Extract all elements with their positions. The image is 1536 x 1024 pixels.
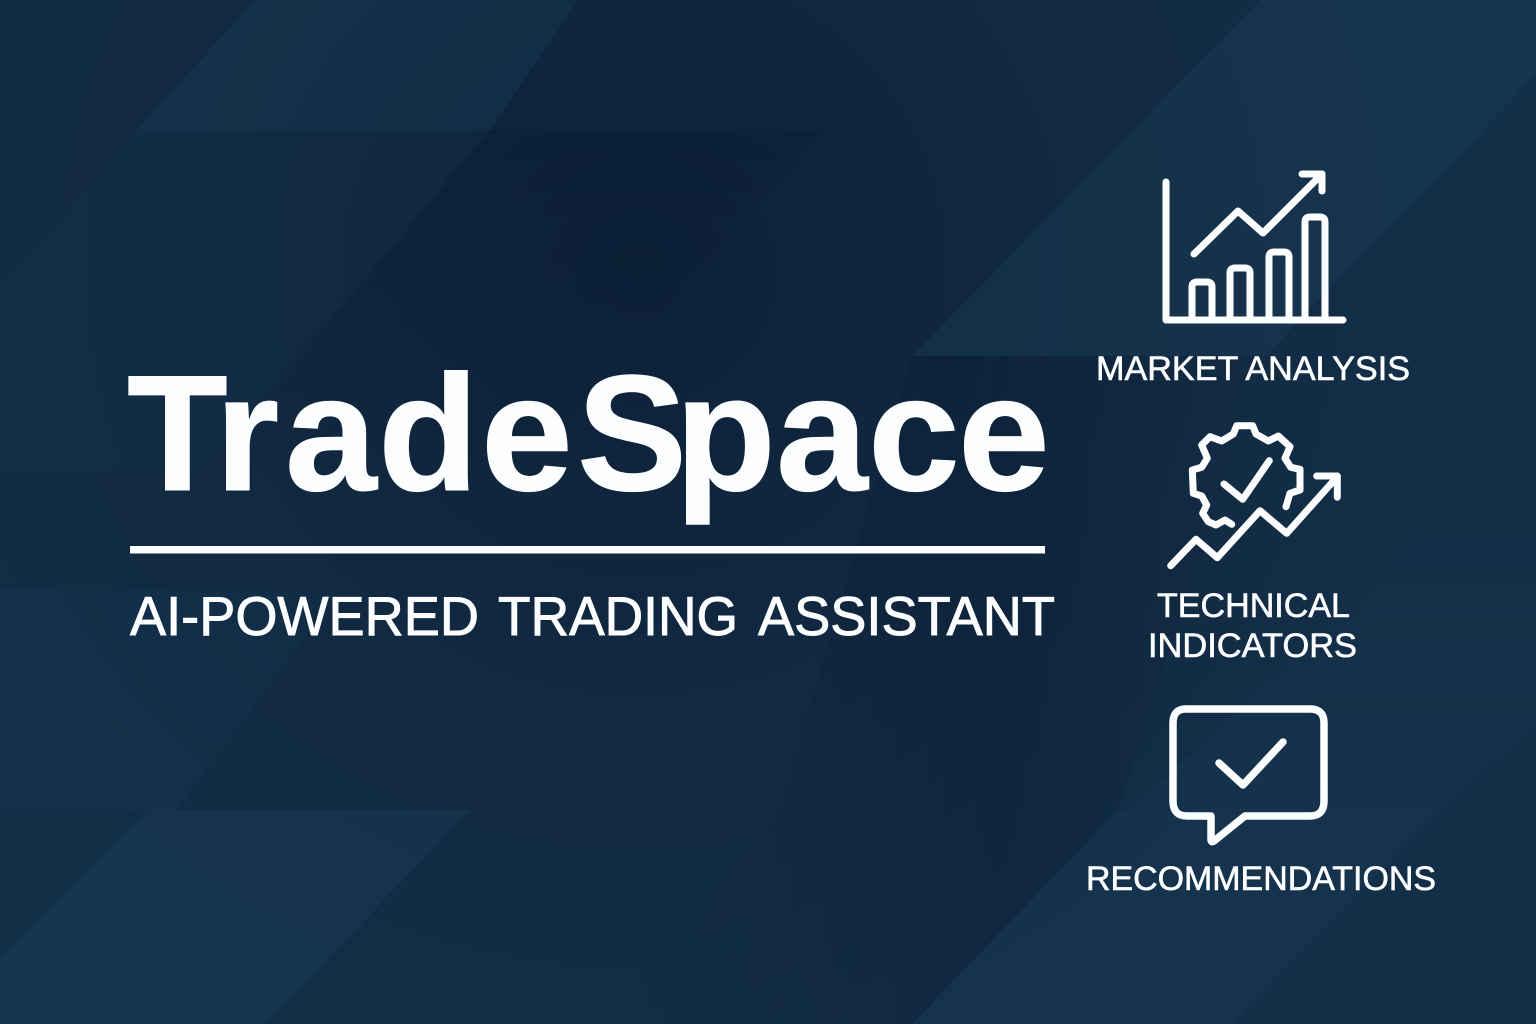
label: technical indicators [1148,587,1357,665]
label: recommendations: RECOMMENDATIONS [1086,860,1436,898]
feature: recommendations [1086,709,1436,898]
title rule [130,546,1045,554]
subtitle: TRADING [498,585,738,647]
title: TradeSpace [127,341,1050,525]
subtitle: ASSISTANT [758,585,1055,647]
feature: technical indicators [1148,426,1357,665]
label: technical indicators: TECHNICAL [1157,587,1350,625]
feature: market analysis [1096,174,1410,388]
icon: gear with check and rising arrow [1171,426,1337,566]
icon: chart with bars and rising arrow [1166,174,1343,320]
label: technical indicators: INDICATORS [1148,627,1357,665]
label: market analysis: MARKET ANALYSIS [1096,350,1410,388]
subtitle: AI-POWERED [130,585,479,647]
icon: speech bubble with check [1173,709,1324,842]
subtitle [130,585,1055,647]
